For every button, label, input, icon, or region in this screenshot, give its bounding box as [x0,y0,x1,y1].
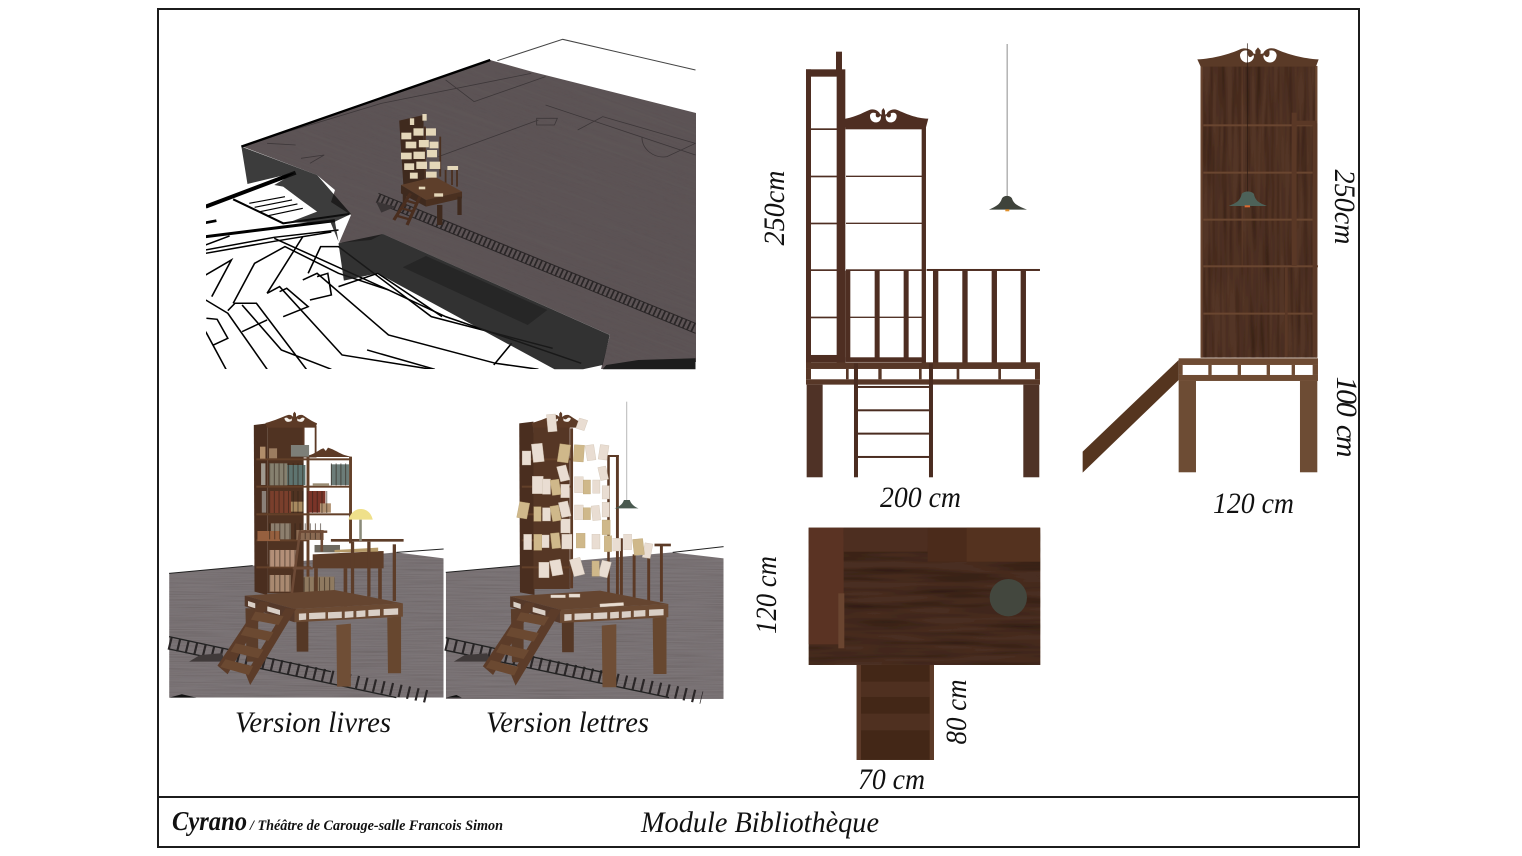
caption: version lettres: Version lettres [486,706,649,739]
small module on stage [394,114,462,225]
books [257,445,349,595]
bare shelves [519,412,671,602]
legs [1179,381,1317,472]
title: module name: Module Bibliothèque [640,806,879,839]
hanging letters [522,414,653,607]
railing [927,269,1040,364]
orchestra plan line drawing [206,39,696,369]
project name: Cyrano [172,806,247,836]
desk [313,548,384,610]
panel: stage overview 3D view [206,38,696,370]
stage floor [241,60,696,369]
hanging lamp [1229,43,1267,207]
sheet frame [158,9,1359,847]
yellow desk lamp [348,509,373,541]
studio floor [169,548,444,698]
bookcase back [1201,66,1318,358]
bookcase frames [806,52,926,363]
panel: side elevation drawing [806,44,1040,477]
caption: version livres: Version livres [235,706,391,739]
bookcase seen from above [809,528,1040,648]
stairs from above [857,665,934,760]
chair [292,532,327,595]
hanging lamp [989,44,1027,211]
platform deck [806,362,1040,385]
platform legs and stairs [483,591,668,687]
title block: project [172,806,503,836]
bookcase [254,412,352,595]
platform top [809,528,1040,665]
ladder [854,363,933,477]
hanging lamp [614,402,638,508]
stage floor rail strip [376,193,696,333]
dimension: front height: 250cm [1328,170,1361,244]
panel: version livres render [169,412,444,698]
dark stage walls [241,60,696,369]
pediment [1197,47,1319,67]
studio floor [446,547,724,699]
dimension: platform height: 100 cm [1330,376,1363,458]
dimension: side width: 200 cm [880,481,961,514]
legs [807,385,1039,477]
pediment [842,108,928,127]
panel: front elevation drawing [1083,43,1319,473]
dimension: stair length: 80 cm [940,680,973,744]
lamp from above [990,579,1027,616]
dimension: side height: 250cm [758,170,791,246]
platform legs and stairs [217,590,403,687]
dimension: stair width: 70 cm [858,763,925,796]
railing [331,539,404,601]
venue: / Théâtre de Carouge-salle Francois Simon [249,818,503,834]
dimension: front width: 120 cm [1213,487,1294,520]
dimension: plan depth: 120 cm [750,556,783,634]
platform deck [1179,358,1318,381]
side ramp [1083,360,1179,473]
panel: plan view drawing [809,528,1040,760]
panel: version lettres render [446,402,724,699]
